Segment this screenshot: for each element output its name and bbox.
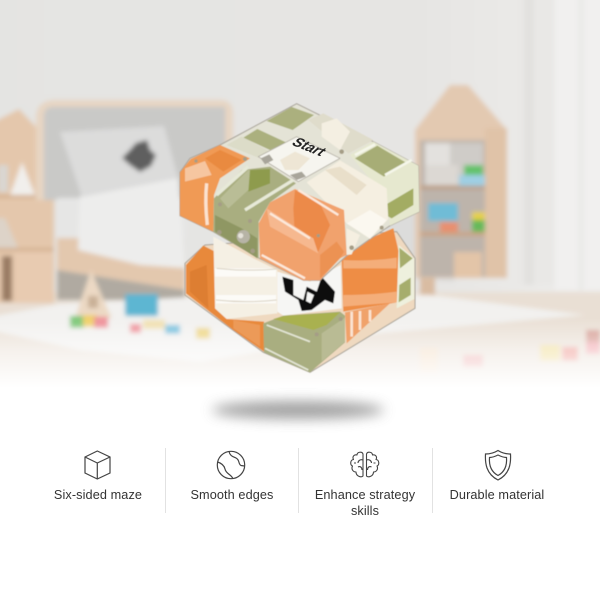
orange stripes bbox=[345, 303, 390, 343]
logo tile bbox=[277, 265, 342, 316]
bottom green block bbox=[263, 312, 345, 372]
bottom layer bbox=[185, 228, 415, 372]
far floor blocks bbox=[420, 330, 600, 372]
divider bbox=[165, 448, 166, 513]
bed base bbox=[57, 198, 187, 300]
icon: cube bbox=[84, 450, 111, 480]
cube shadow bbox=[212, 401, 384, 419]
right orange block bbox=[342, 228, 399, 312]
rug bbox=[0, 295, 585, 362]
duvet bbox=[78, 178, 185, 268]
toy cone bbox=[70, 270, 112, 328]
right green block bbox=[350, 142, 419, 226]
icon: shield bbox=[484, 450, 512, 481]
top layer hull bbox=[180, 104, 419, 280]
label: enhance strategy skills: Enhance strategy bbox=[315, 488, 415, 502]
right bed section bbox=[385, 205, 455, 309]
toy blocks bbox=[125, 294, 210, 339]
pillow star bbox=[122, 140, 156, 172]
icon: brain bbox=[350, 452, 380, 478]
orange left block bbox=[180, 145, 250, 232]
divider bbox=[432, 448, 433, 513]
label: enhance strategy skills bbox=[315, 488, 415, 518]
divider bbox=[298, 448, 299, 513]
icon: sphere bbox=[216, 450, 246, 480]
label: smooth edges: Smooth edges bbox=[190, 488, 274, 502]
label: durable material: Durable material bbox=[450, 488, 544, 502]
right house shelf bbox=[415, 85, 507, 278]
curtains bbox=[516, 0, 600, 290]
white block bbox=[213, 237, 277, 319]
label: six-sided maze: Six-sided maze bbox=[54, 488, 142, 502]
left house shelf bbox=[0, 109, 54, 303]
right green block bbox=[397, 245, 414, 308]
screws bbox=[194, 149, 384, 336]
top face greens bbox=[227, 107, 373, 158]
orange front block bbox=[259, 189, 347, 280]
bed headboard bbox=[36, 100, 233, 200]
start tile background bbox=[258, 137, 340, 182]
pillow bbox=[60, 126, 178, 197]
white centre-right block bbox=[307, 160, 388, 255]
label: enhance strategy skills: skills bbox=[351, 504, 379, 518]
green front block bbox=[213, 167, 296, 258]
start label: Start bbox=[288, 136, 330, 159]
